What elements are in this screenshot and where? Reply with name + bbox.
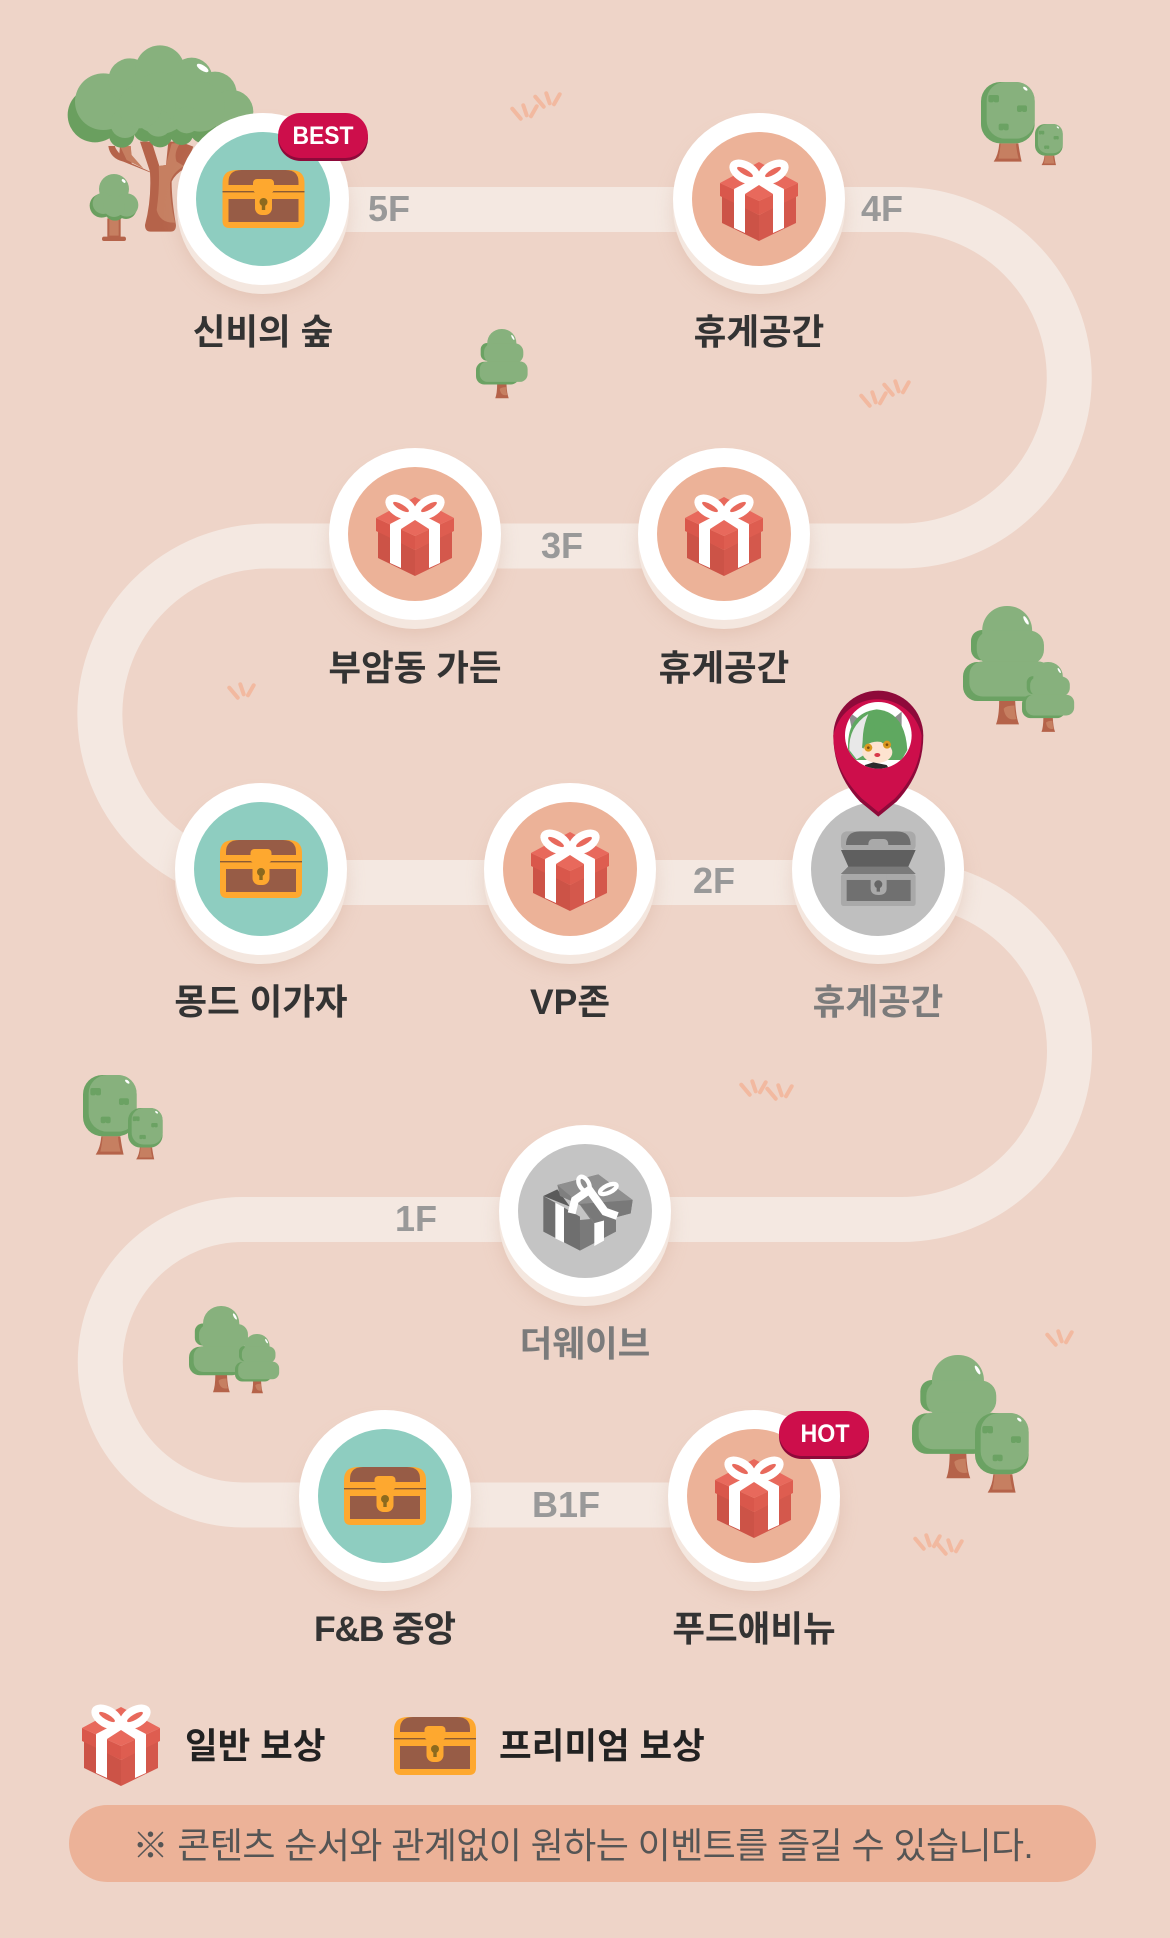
node: 몽드 이가자 — [175, 783, 347, 967]
tree centre — [476, 329, 528, 398]
small tree beside big tree — [90, 174, 138, 241]
legend: premium reward — [394, 1717, 705, 1775]
node: 푸드애비뉴 — [668, 1410, 840, 1594]
location names: F&B 중앙 — [314, 1609, 456, 1649]
legend: normal reward — [82, 1699, 326, 1786]
location names: 더웨이브 — [520, 1324, 650, 1364]
node: 휴게공간 2F (opened chest, grey) — [792, 783, 964, 967]
location names: 휴게공간 — [813, 982, 943, 1022]
note pill: ※ 콘텐츠 순서와 관계없이 원하는 이벤트를 즐길 수 있습니다. — [132, 1825, 1034, 1866]
floor labels: 1F — [395, 1198, 437, 1239]
legend: normal reward: 일반 보상 — [185, 1726, 326, 1766]
badge: BEST — [278, 113, 368, 161]
location names: 휴게공간 — [694, 312, 824, 352]
map pin with character avatar — [833, 691, 923, 817]
trees lower left — [189, 1306, 279, 1393]
node: F&B 중앙 — [299, 1410, 471, 1594]
winding road path — [100, 210, 1069, 1505]
trees top right — [981, 82, 1063, 165]
location names: 부암동 가든 — [328, 648, 502, 688]
badge: HOT — [779, 1411, 869, 1459]
floor labels: 4F — [861, 188, 903, 229]
badge: HOT: HOT — [800, 1420, 850, 1448]
trees lower right — [912, 1355, 1029, 1493]
location names: 푸드애비뉴 — [672, 1609, 836, 1649]
node: 휴게공간 3F — [638, 448, 810, 632]
floor labels: 3F — [541, 525, 583, 566]
floor labels: 2F — [693, 860, 735, 901]
floor labels: B1F — [532, 1484, 600, 1525]
floor labels: 5F — [368, 188, 410, 229]
floor labels — [368, 188, 903, 1525]
node: 더웨이브 (opened gift, grey) — [499, 1125, 671, 1309]
node: 부암동 가든 3F — [329, 448, 501, 632]
location names: 신비의 숲 — [193, 312, 333, 352]
location names: 몽드 이가자 — [174, 982, 348, 1022]
grass tufts — [229, 93, 1072, 1554]
node: VP존 — [484, 783, 656, 967]
trees right — [963, 606, 1074, 732]
note pill — [69, 1805, 1096, 1882]
big tree top left — [68, 45, 253, 232]
location names: 휴게공간 — [659, 648, 789, 688]
node: 신비의 숲 5F — [177, 113, 349, 297]
trees left — [83, 1075, 163, 1159]
location names — [174, 312, 943, 1649]
location names: VP존 — [530, 982, 610, 1022]
badge: BEST: BEST — [292, 122, 354, 150]
legend: premium reward: 프리미엄 보상 — [499, 1726, 705, 1766]
node: 휴게공간 4F — [673, 113, 845, 297]
